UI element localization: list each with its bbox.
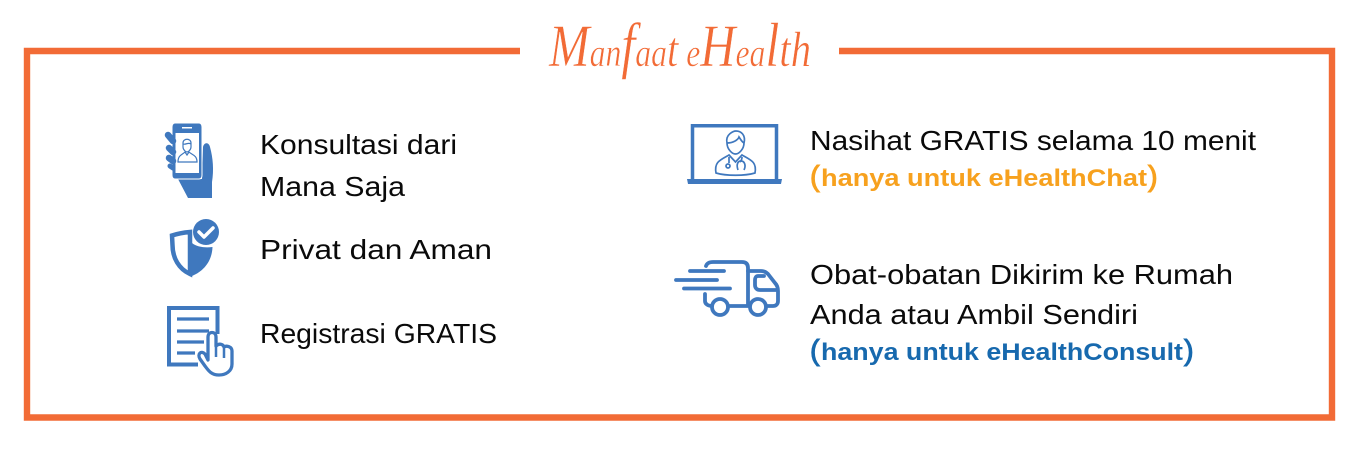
text: hanya untuk eHealthChat [810, 161, 1158, 193]
panel: orange frame [27, 51, 1332, 418]
text: hanya untuk eHealthChat: ( [810, 161, 820, 193]
text: Konsultasi dari Mana Saja [260, 129, 457, 202]
text: hanya untuk eHealthConsult: hanya untuk eHealthConsult [821, 339, 1183, 366]
icon: laptop with doctor [687, 126, 782, 184]
text: Obat-obatan Dikirim ke Rumah Anda atau Ambil Sendiri [810, 259, 1233, 330]
text: Nasihat GRATIS selama 10 menit: Nasihat GRATIS selama 10 menit [810, 125, 1256, 156]
text: hanya untuk eHealthChat: hanya untuk eHealthChat [821, 165, 1147, 192]
text: Obat-obatan Dikirim ke Rumah Anda atau Ambil Sendiri: Obat-obatan Dikirim ke Rumah [810, 259, 1233, 290]
text: Obat-obatan Dikirim ke Rumah Anda atau Ambil Sendiri: Anda atau Ambil Sendiri [810, 299, 1138, 330]
text: hanya untuk eHealthChat: ) [1148, 161, 1158, 193]
icon: delivery truck with speed lines [676, 262, 778, 315]
icon: document with pointing hand [169, 308, 232, 375]
text: hanya untuk eHealthConsult: ) [1184, 335, 1194, 367]
icon: phone in hand with doctor [168, 123, 213, 198]
text: Registrasi GRATIS: Registrasi GRATIS [260, 318, 497, 349]
title: Manfaat eHealth [548, 12, 811, 80]
text: Konsultasi dari Mana Saja: Konsultasi dari [260, 129, 457, 160]
text: Privat dan Aman: Privat dan Aman [260, 234, 492, 265]
text: hanya untuk eHealthConsult: ( [810, 335, 820, 367]
text: Konsultasi dari Mana Saja: Mana Saja [260, 171, 405, 202]
icon: shield with check [172, 219, 219, 276]
